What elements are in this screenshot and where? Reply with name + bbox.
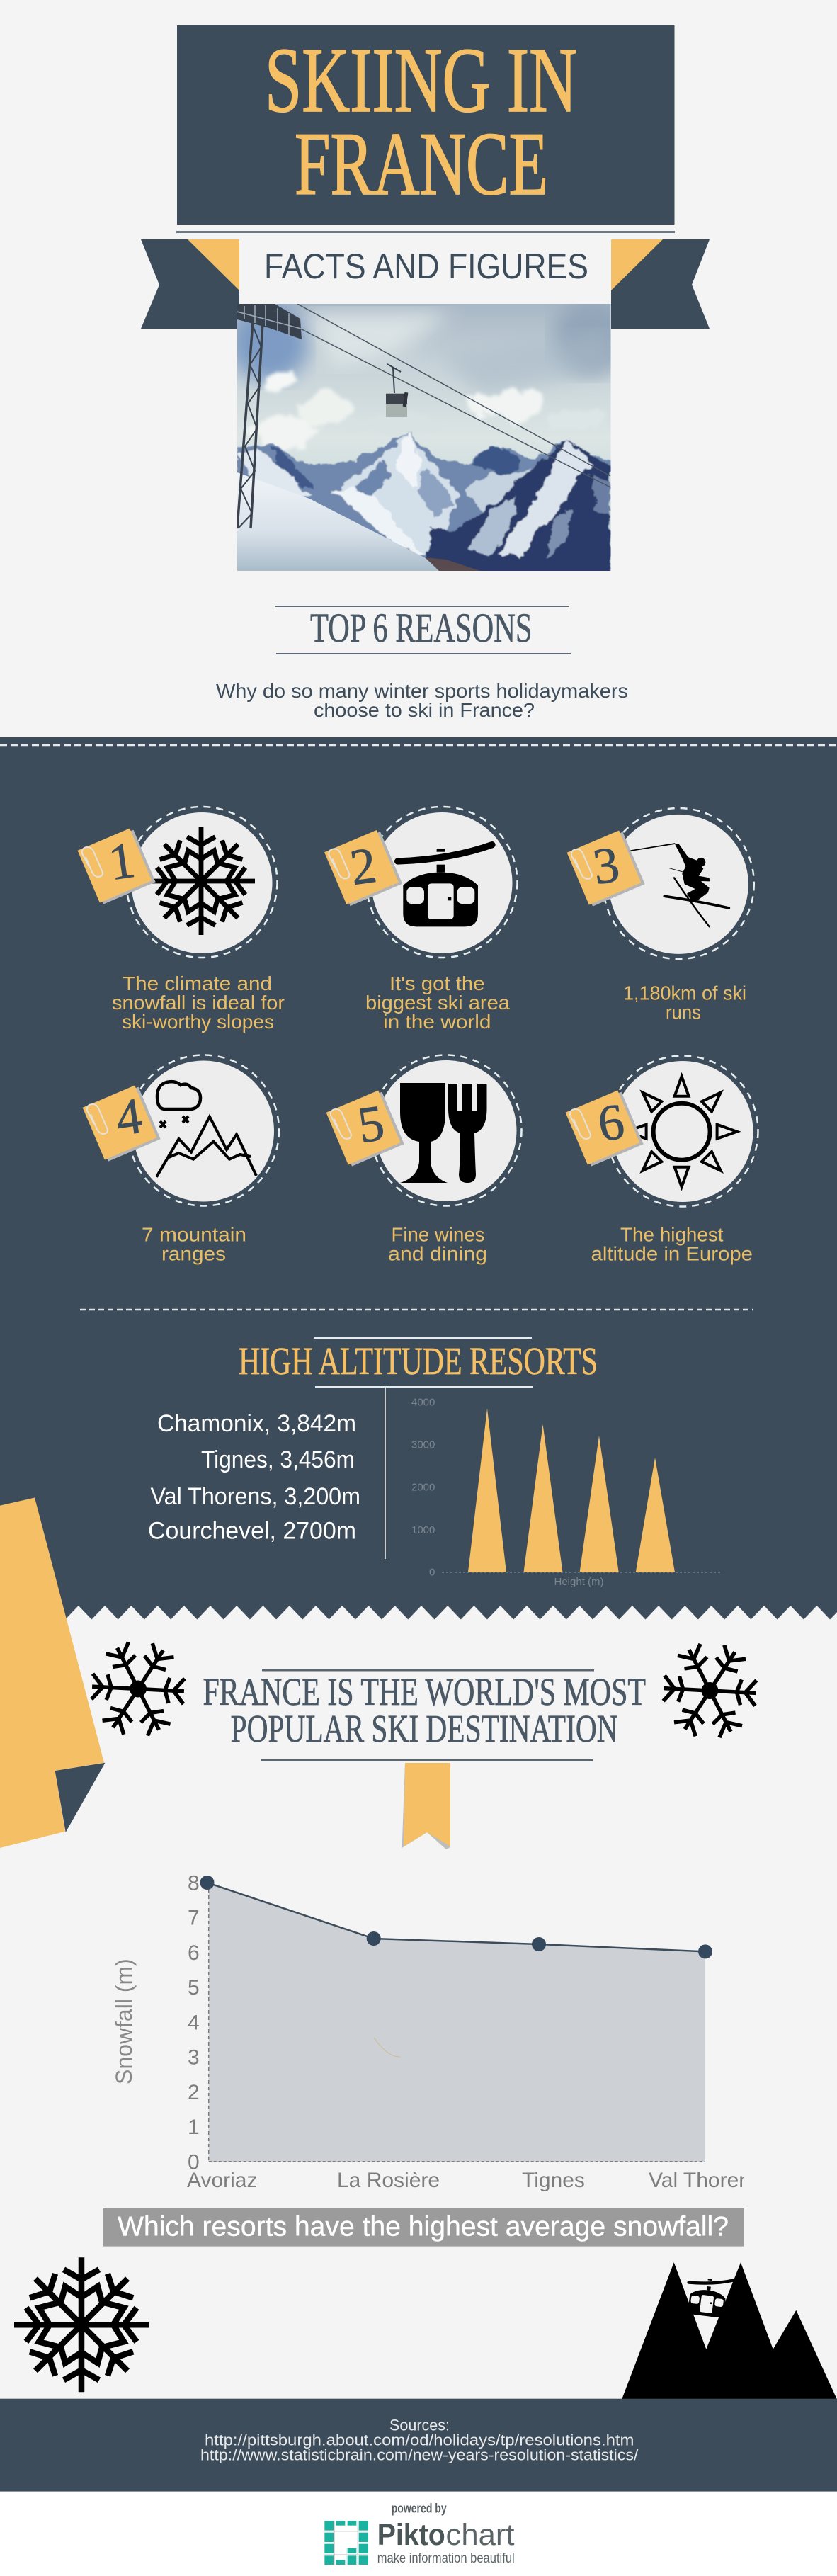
number note 3 [567,831,645,907]
heading: most popular destination [203,1669,646,1761]
ribbon banner: FACTS AND FIGURES [264,246,588,286]
caption 1: snowfall is ideal for [112,992,285,1014]
resort altitude list: Chamonix, 3,842m [157,1410,356,1437]
chart: resort height triangles: 4000 [411,1397,435,1408]
mountains with gondola [622,2262,837,2399]
logo mark [324,2521,368,2565]
reason 5: wines and dining [326,1055,521,1265]
caption 2: in the world [383,1011,491,1033]
resort altitude list: Courchevel, 2700m [148,1518,356,1545]
icon: skier [628,844,729,926]
reason 2: biggest ski area [324,807,517,1033]
icon: mountains and cloud [156,1082,256,1177]
y axis labels [188,1871,200,2174]
caption 2 [365,972,510,1033]
footer sources panel [0,2399,837,2492]
caption 5 [388,1224,487,1265]
chart caption bar: Which resorts have the highest average snowfall? [118,2211,729,2242]
number note 1 [78,829,156,904]
heading: most popular destination: FRANCE IS THE WORLD'S MOST [203,1670,646,1713]
caption 2: biggest ski area [365,992,510,1014]
title panel [177,25,674,225]
resort altitude list: Tignes, 3,456m [201,1446,355,1473]
white attribution strip [0,2492,837,2576]
caption 1: ski-worthy slopes [122,1011,274,1033]
piktochart logo: Pikto [377,2518,445,2552]
powered by label: powered by [392,2502,447,2516]
footer sources panel: http://pittsburgh.about.com/od/holidays/tp/resolutions.htm [205,2431,634,2449]
caption 1 [112,972,285,1033]
reason 3: km of ski runs [567,808,754,1023]
caption 6: altitude in Europe [591,1243,753,1265]
number note 1: 1 [106,832,138,891]
y axis labels: 3 [188,2046,200,2070]
x axis labels: La Rosière [337,2169,440,2192]
footer sources panel: Sources: [389,2417,450,2434]
chart: resort height triangles: Height (m) [554,1576,604,1588]
reason 6: highest altitude [566,1055,758,1265]
icon: large snowflake [14,2257,149,2392]
title panel: FRANCE [295,115,548,214]
reason 1: climate and snowfall [78,807,285,1033]
resort altitude list [148,1410,360,1545]
caption 3: 1,180km of ski [623,982,746,1004]
footer sources panel: http://www.statisticbrain.com/new-years-resolution-statistics/ [200,2446,639,2463]
photo: cable car over snowy mountains [237,304,610,571]
number note 2: 2 [347,836,380,896]
number note 3: 3 [590,836,622,895]
icon: gondola [398,845,492,926]
dark reasons panel [0,737,837,1619]
x axis labels: Val Thorens [649,2169,761,2192]
caption 3 [623,982,746,1023]
chart: snowfall area chart [111,1871,761,2192]
caption 5: and dining [388,1243,487,1265]
chart: resort height triangles: 0 [429,1567,435,1578]
icon: snowflake right [661,1642,758,1740]
caption 1: The climate and [123,972,272,994]
title underline [176,231,675,233]
caption 2: It's got the [389,972,484,994]
caption 4 [142,1224,246,1265]
caption 4: ranges [161,1243,226,1265]
x axis labels: Avoriaz [187,2169,258,2192]
reason 4: mountain ranges [83,1055,279,1265]
caption 5: Fine wines [391,1224,484,1246]
x axis labels: Tignes [522,2169,585,2192]
resort altitude list: Val Thorens, 3,200m [150,1483,360,1510]
x axis labels [187,2172,744,2191]
y axis labels: 2 [188,2081,200,2104]
caption 4: 7 mountain [142,1224,246,1246]
chart: resort height triangles: 1000 [411,1524,435,1536]
icon: sun [627,1077,737,1187]
number note 5: 5 [355,1094,387,1154]
intro text: Why do so many winter sports holidaymakers [216,680,628,702]
y axis labels: 7 [188,1907,200,1929]
y axis labels: 0 [188,2150,200,2174]
piktochart logo: chart [446,2518,515,2552]
icon: snowflake [147,827,255,935]
piktochart logo [324,2518,515,2566]
heading: high altitude resorts: HIGH ALTITUDE RESORTS [239,1339,598,1383]
y axis labels: 8 [188,1871,200,1895]
number note 4: 4 [113,1087,145,1147]
number note 5 [326,1091,404,1167]
folded yellow ribbon [0,1497,105,1848]
number note 6 [566,1091,644,1167]
ribbon banner [141,239,710,329]
small bookmark ribbon [402,1763,450,1849]
heading: top 6 reasons: TOP 6 REASONS [310,605,533,651]
number note 4 [83,1086,161,1162]
icon: snowflake left [90,1640,186,1737]
chart: resort height triangles: 2000 [411,1482,435,1493]
intro text [216,680,628,721]
piktochart logo: make information beautiful [377,2551,515,2566]
y axis title: Snowfall (m) [111,1958,137,2084]
y axis labels: 1 [188,2116,200,2139]
number note 6: 6 [595,1093,627,1152]
title panel: SKIING IN [265,29,577,132]
caption 6 [591,1224,753,1265]
chart: resort height triangles [411,1397,721,1588]
y axis labels: 6 [188,1941,200,1965]
heading: most popular destination: POPULAR SKI DESTINATION [231,1707,618,1750]
number note 2 [324,830,402,906]
y axis labels: 4 [188,2012,200,2034]
icon: wine glass and fork [400,1083,487,1183]
y axis labels: 5 [188,1976,200,1999]
caption 3: runs [666,1002,701,1023]
chart: resort height triangles: 3000 [411,1439,435,1451]
intro text: choose to ski in France? [314,699,535,721]
caption 6: The highest [620,1224,724,1246]
